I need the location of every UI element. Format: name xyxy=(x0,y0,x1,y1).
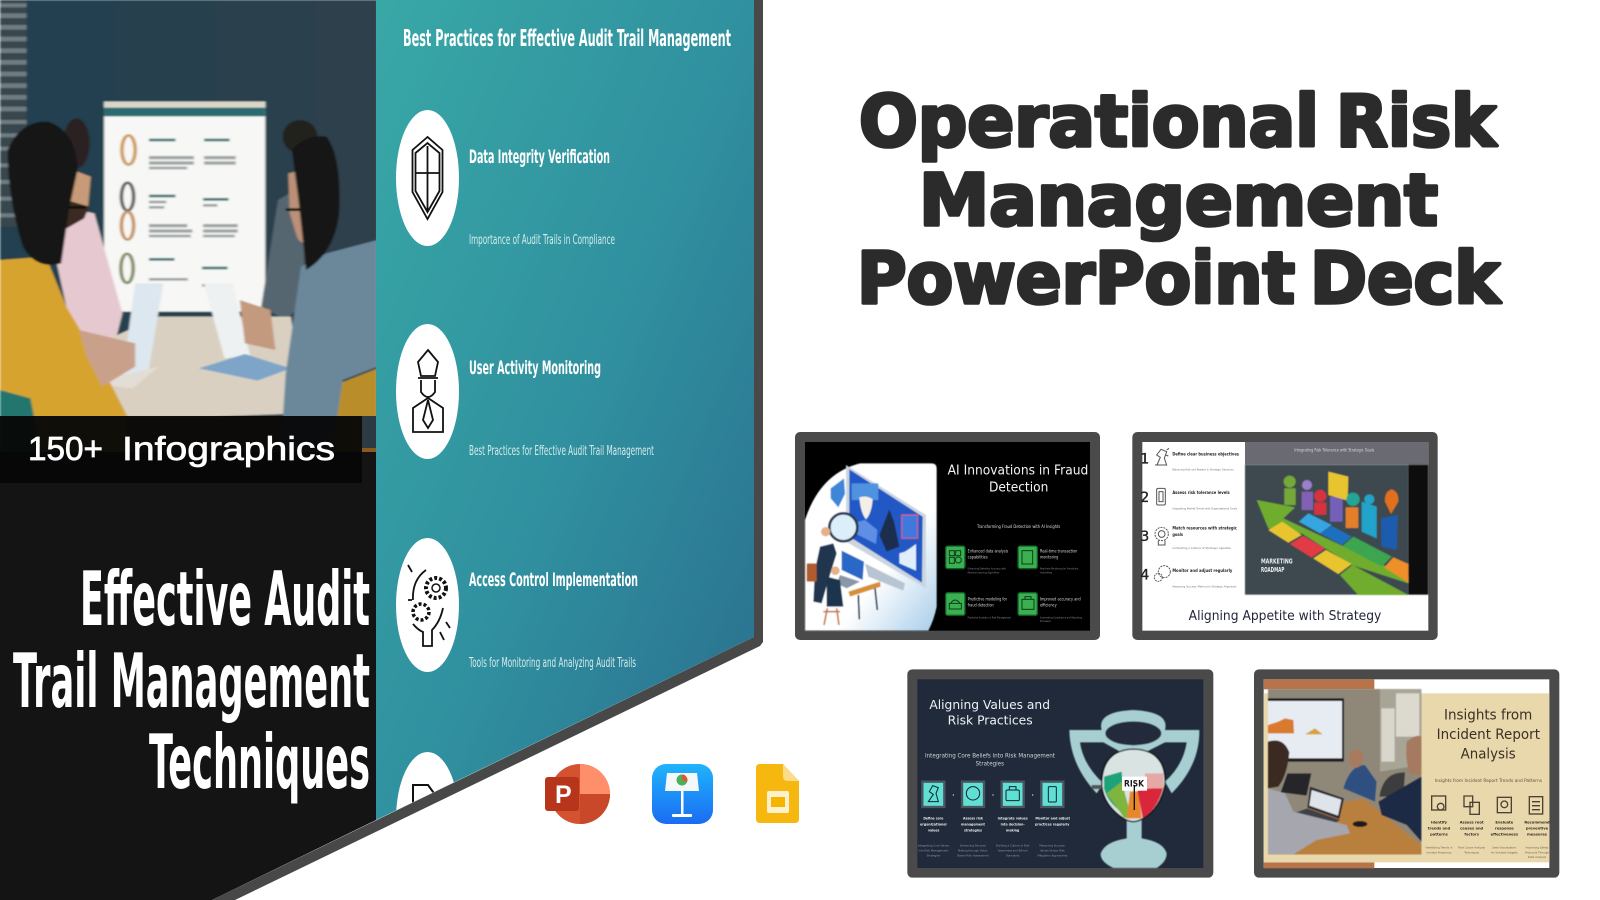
slide heading: Insights from xyxy=(1444,707,1532,723)
icon: Keynote xyxy=(652,764,713,824)
four insight steps: effectiveness xyxy=(1491,832,1518,836)
photo edge beside badge xyxy=(362,416,376,452)
slide header: Integrating Risk Tolerance with Strategic Goals xyxy=(1294,448,1374,453)
numbered steps: 3 xyxy=(1140,529,1149,545)
numbered steps: Monitor and adjust regularly xyxy=(1172,568,1232,574)
feature grid: capabilities xyxy=(968,554,988,560)
four insight steps xyxy=(1426,796,1550,859)
text: Techniques xyxy=(149,718,370,806)
four value steps: management xyxy=(961,823,985,827)
slide heading: Detection xyxy=(989,481,1048,496)
feature grid: Predictive modeling for xyxy=(968,596,1007,602)
slide heading: AI Innovations in Fraud xyxy=(948,463,1088,478)
slide heading xyxy=(948,463,1088,496)
four value steps: Values-Driven Risk xyxy=(1040,849,1065,853)
numbered steps: goals xyxy=(1172,532,1183,538)
slide title: Aligning Appetite with Strategy xyxy=(1189,609,1381,624)
heading: Effective Audit Trail Management Techniques xyxy=(13,555,370,806)
main title: PowerPoint xyxy=(857,237,1295,320)
four insight steps: Identify xyxy=(1431,821,1448,825)
thumbnail: Aligning Values and Risk Practices xyxy=(907,669,1213,878)
trophy risk gauge xyxy=(1069,710,1199,868)
feature grid: monitoring xyxy=(1040,554,1059,560)
subtitle xyxy=(925,752,1055,767)
four insight steps: trends and xyxy=(1428,827,1451,831)
icon: Google Slides xyxy=(756,764,799,823)
numbered steps: Assess risk tolerance levels xyxy=(1172,490,1230,496)
four insight steps: Improving Safety xyxy=(1526,846,1549,850)
main title: Management xyxy=(919,159,1438,242)
item: partially hidden fourth item xyxy=(396,752,454,810)
four value steps: Integrating Core Values xyxy=(918,844,950,848)
meeting room photo xyxy=(1268,689,1421,854)
feature grid: Machine Learning Algorithms xyxy=(968,571,1000,574)
feature grid: Real-time Monitoring for Fraudulent xyxy=(1040,568,1078,571)
thumbnail: AI Innovations in Fraud Detection: Transforming Fraud Detection with AI Insights xyxy=(976,524,1060,529)
four insight steps: Evaluate xyxy=(1495,821,1514,825)
roadmap label: MARKETING xyxy=(1261,557,1293,565)
thumbnail: Insights from Incident Report Analysis xyxy=(1254,669,1559,878)
slide heading: Risk Practices xyxy=(948,712,1033,727)
four insight steps: response xyxy=(1495,827,1514,831)
numbered steps: 2 xyxy=(1140,490,1149,506)
four insight steps: for Incident Insights xyxy=(1491,850,1518,854)
item: data integrity verification xyxy=(396,110,615,248)
four value steps: Building a Culture of Risk xyxy=(996,844,1030,848)
four value steps: Based Risk Assessment xyxy=(957,854,989,858)
four value steps: values xyxy=(928,829,939,833)
numbered steps: Define clear business objectives xyxy=(1172,451,1239,457)
feature grid: Enhanced data analysis xyxy=(968,549,1009,555)
four value steps: organizational xyxy=(920,823,947,827)
main title: Risk xyxy=(1336,80,1498,163)
roadmap label xyxy=(1261,557,1293,574)
feature grid: Real-time transaction xyxy=(1040,549,1078,555)
numbered steps: 4 xyxy=(1140,567,1149,583)
feature grid: fraud detection xyxy=(968,602,994,608)
four insight steps: factors xyxy=(1464,832,1479,836)
text: Trail Management xyxy=(13,637,370,725)
four value steps: Making through Value- xyxy=(958,849,988,853)
main title: Operational xyxy=(859,80,1319,163)
four value steps: Assess risk xyxy=(963,817,983,821)
slide heading: Analysis xyxy=(1461,747,1516,763)
item: user activity monitoring: User Activity Monitoring xyxy=(469,357,601,379)
slide header xyxy=(1245,442,1428,465)
four insight steps: Protocols Through xyxy=(1525,850,1549,854)
four value steps: Integrate values xyxy=(998,817,1028,821)
feature grid: efficiency xyxy=(1040,602,1057,608)
slide heading: Incident Report xyxy=(1437,727,1540,743)
four value steps: practices regularly xyxy=(1035,823,1070,827)
numbered steps: Measuring Success: Metrics for Strategic Alignment xyxy=(1172,584,1236,588)
numbered steps: Balancing Risk and Reward in Strategic Decisions xyxy=(1172,468,1234,472)
subtitle: Integrating Core Beliefs into Risk Management xyxy=(925,752,1055,759)
four insight steps: Data Visualization xyxy=(1492,846,1517,850)
item: access control implementation: Access Control Implementation xyxy=(469,569,638,591)
left panel: meeting photo xyxy=(0,0,378,453)
feature grid: Processes xyxy=(1040,620,1051,623)
panel: best practices slide xyxy=(376,0,754,900)
badge: 150+ Infographics xyxy=(0,416,362,483)
item: data integrity verification: Importance of Audit Trails in Compliance xyxy=(469,232,615,248)
item: data integrity verification: Data Integrity Verification xyxy=(469,146,610,168)
item: user activity monitoring: Best Practices for Effective Audit Trail Management xyxy=(469,443,654,459)
slide heading: Aligning Values and xyxy=(929,697,1050,712)
feature grid: Activities xyxy=(1040,571,1053,574)
four value steps: Monitor and adjust xyxy=(1035,817,1070,821)
feature grid: Automating Compliance and Reporting xyxy=(1040,616,1082,619)
gauge label: RISK xyxy=(1124,780,1145,790)
text: Effective Audit xyxy=(80,555,370,643)
four insight steps: Assess root xyxy=(1460,821,1484,825)
four value steps: Mitigation Approaches xyxy=(1037,854,1068,858)
four value steps: Strategies xyxy=(927,854,941,858)
main title xyxy=(857,80,1502,320)
four insight steps: preventive xyxy=(1526,827,1549,831)
thumbnail: Aligning Appetite with Strategy xyxy=(1132,432,1438,640)
feature grid: Improved accuracy and xyxy=(1040,596,1081,602)
subtitle: Strategies xyxy=(976,760,1004,767)
panel: best practices slide: Best Practices for Effective Audit Trail Management xyxy=(403,26,731,52)
four value steps: making xyxy=(1006,829,1020,833)
numbered steps: 1 xyxy=(1140,451,1149,467)
numbered steps: Integrating Market Trends with Organizational Goals xyxy=(1172,507,1238,511)
roadmap label: ROADMAP xyxy=(1261,566,1284,574)
four value steps: Awareness and Ethical xyxy=(998,849,1028,853)
feature grid: Enhancing Detection Accuracy with xyxy=(968,568,1006,571)
badge: 150+ Infographics: 150+ xyxy=(28,430,103,467)
four insight steps: Techniques xyxy=(1464,850,1480,854)
item: user activity monitoring xyxy=(396,324,654,459)
four insight steps: measures xyxy=(1527,832,1547,836)
four insight steps: patterns xyxy=(1430,832,1448,836)
badge: 150+ Infographics: Infographics xyxy=(122,430,335,467)
slide heading xyxy=(929,697,1050,727)
thumbnail: AI Innovations in Fraud Detection xyxy=(795,432,1100,640)
four value steps: into Risk Management xyxy=(918,849,948,853)
main title: Deck xyxy=(1310,237,1502,320)
four value steps: Enhancing Decision xyxy=(960,844,986,848)
numbered steps: Match resources with strategic xyxy=(1172,526,1237,532)
four insight steps: causes and xyxy=(1460,827,1484,831)
four insight steps: Incident Frequency xyxy=(1426,850,1452,854)
four insight steps: Recommend xyxy=(1524,821,1550,825)
slide heading xyxy=(1437,707,1540,763)
thumbnail: Insights from Incident Report Analysis: Insights from Incident Report Trends and Patterns xyxy=(1435,778,1543,784)
four value steps: Define core xyxy=(923,817,944,821)
four value steps: into decision- xyxy=(1001,823,1025,827)
four value steps: Standards xyxy=(1006,854,1020,858)
left panel: black background xyxy=(0,452,376,900)
item: access control implementation xyxy=(396,538,638,672)
four insight steps: Root Cause Analysis xyxy=(1458,846,1486,850)
four value steps xyxy=(918,782,1070,858)
roadmap image xyxy=(1245,465,1428,595)
four insight steps: Data Analysis xyxy=(1528,855,1547,859)
numbered steps xyxy=(1140,448,1239,588)
item: access control implementation: Tools for Monitoring and Analyzing Audit Trails xyxy=(468,655,636,671)
numbered steps: Cultivating a Culture of Strategic Appetite xyxy=(1172,546,1231,550)
slanted frame border xyxy=(212,0,763,900)
icon: PowerPoint: P xyxy=(555,781,572,809)
illustration: fraud analysts at monitor xyxy=(805,463,937,631)
feature grid: Predictive Analytics in Risk Management xyxy=(968,616,1011,619)
icon: PowerPoint xyxy=(545,764,610,824)
four value steps: strategies xyxy=(964,829,982,833)
four insight steps: Identifying Trends in xyxy=(1426,846,1453,850)
four value steps: Measuring Success: xyxy=(1039,844,1066,848)
gauge label xyxy=(1122,777,1147,810)
feature grid xyxy=(946,546,1082,623)
